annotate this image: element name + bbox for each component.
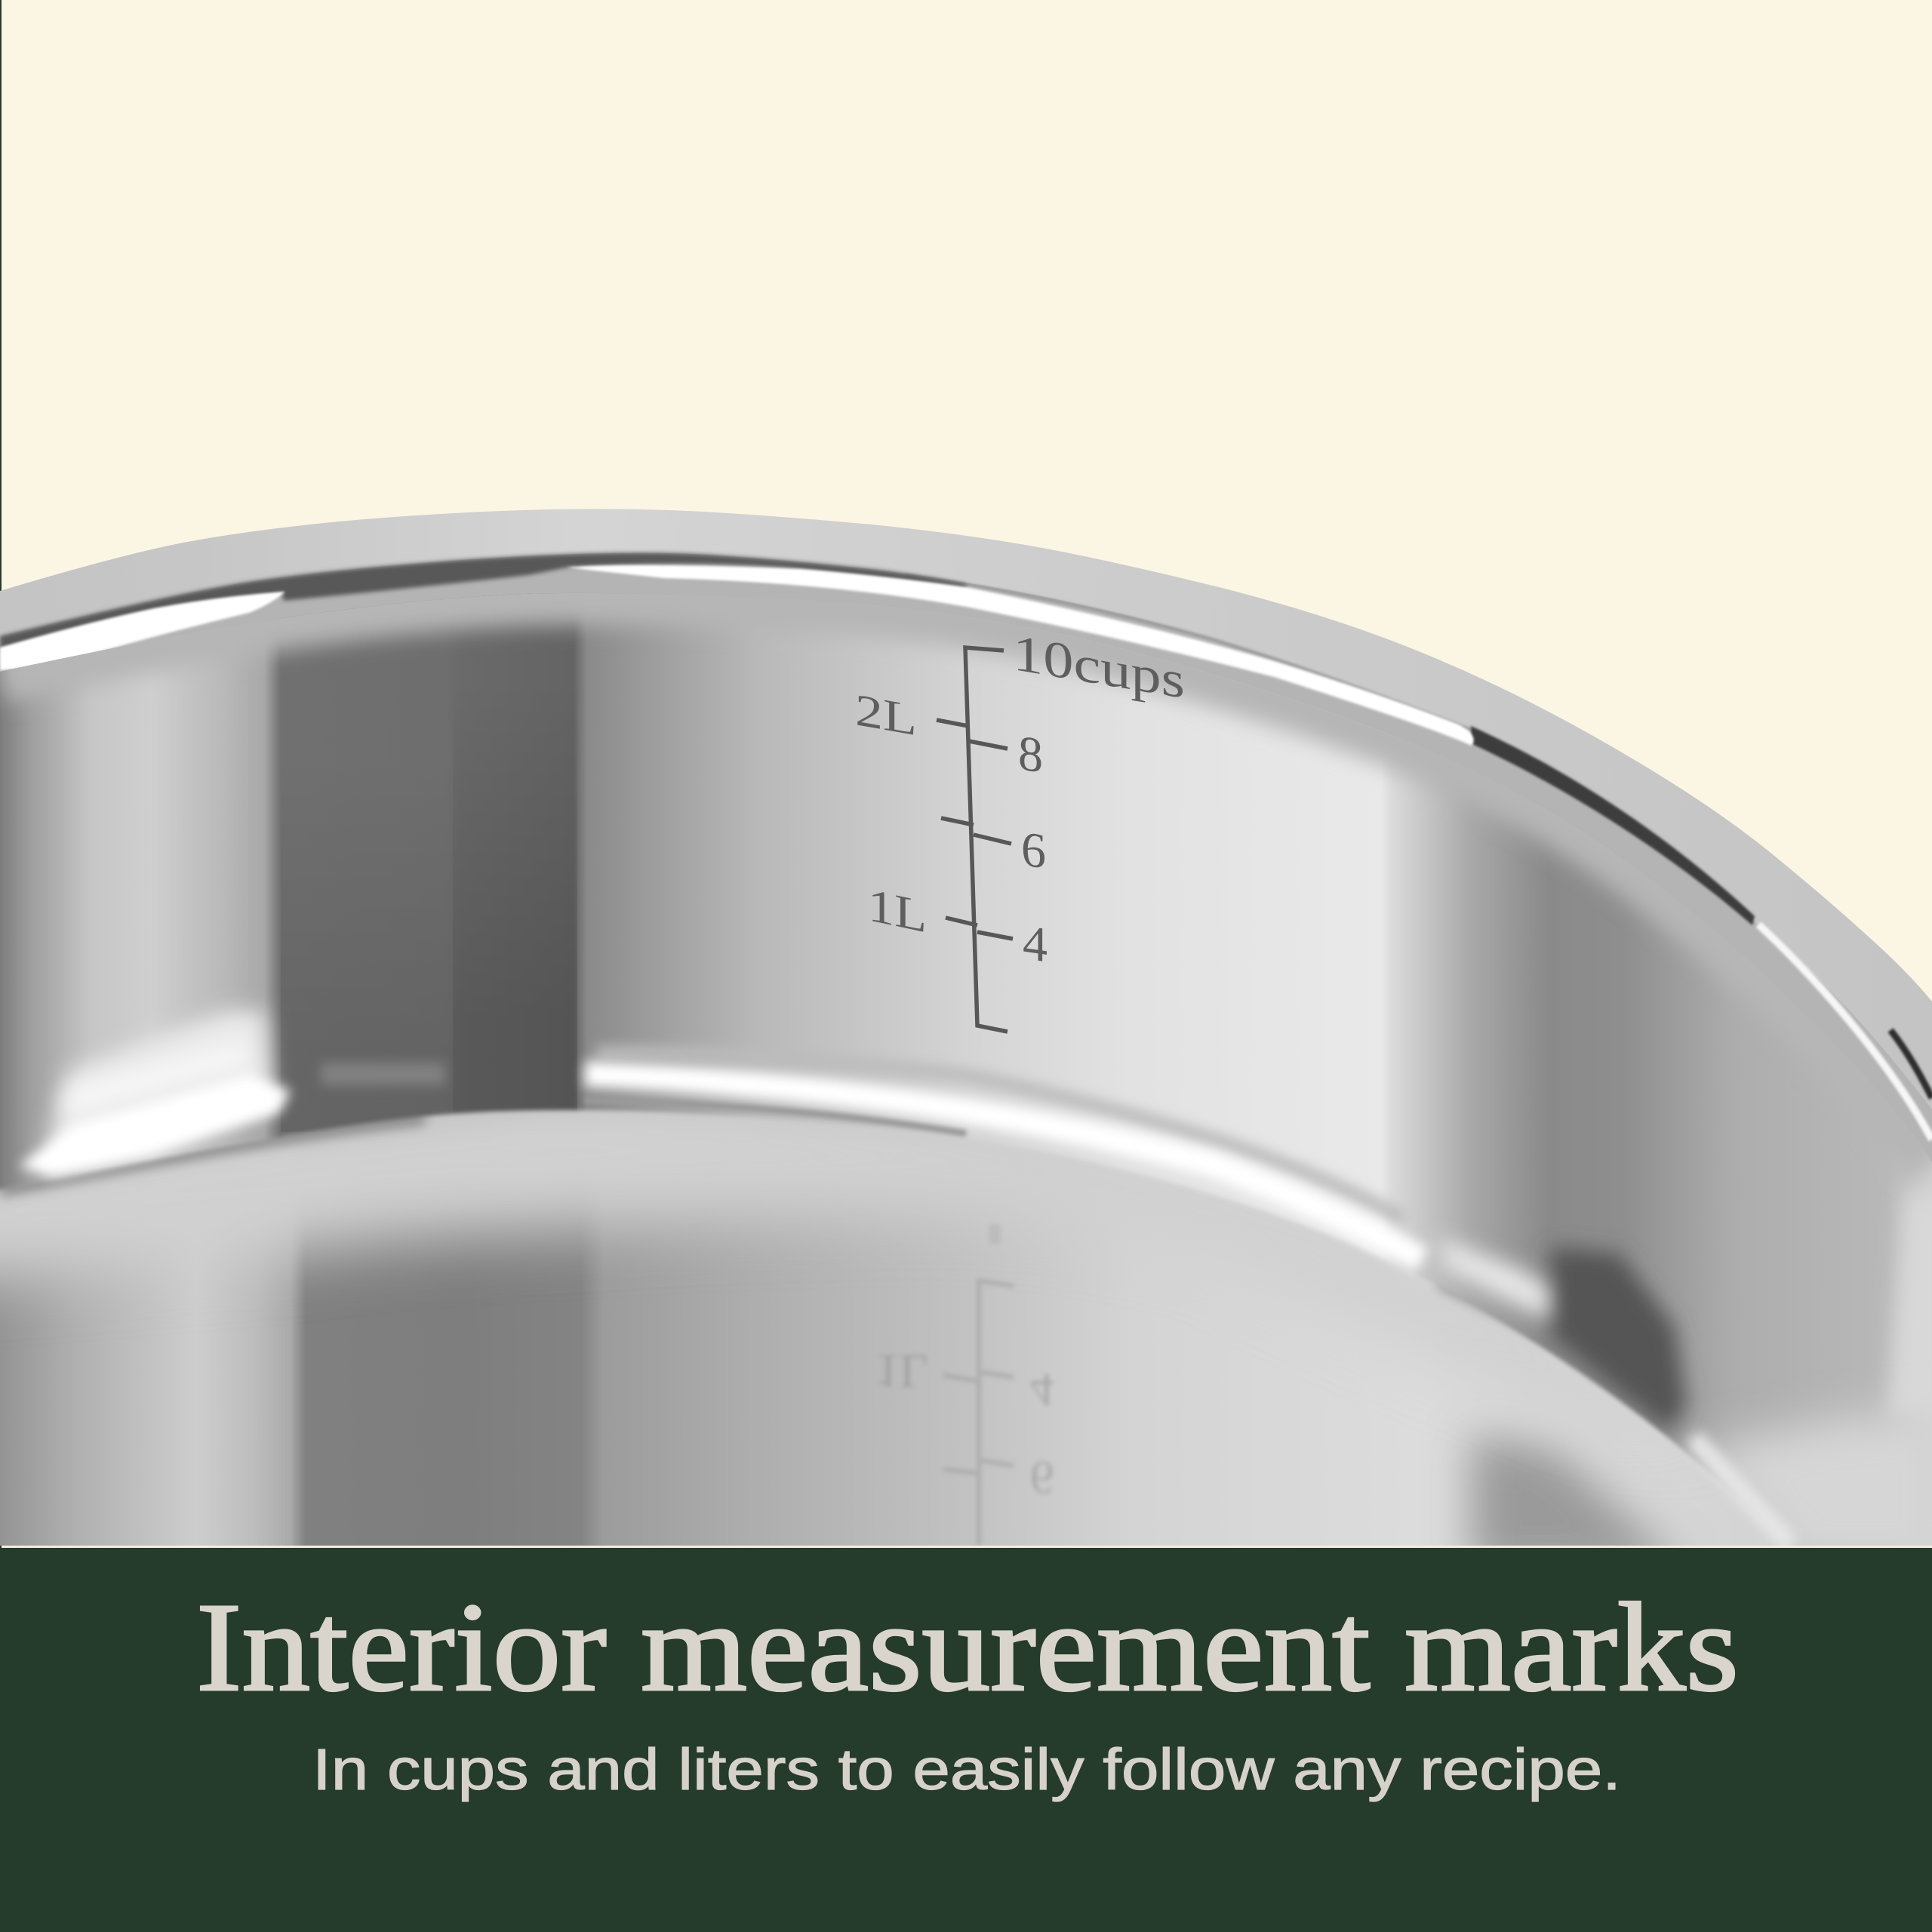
junction bright arc (585, 1074, 1422, 1260)
right wall pale edge (1887, 1192, 1932, 1419)
wall top soft band (0, 593, 1932, 1162)
lip top thin shadow (906, 575, 1471, 730)
left junction glow (45, 1011, 272, 1158)
left floor edge shadow (0, 1118, 425, 1191)
rim highlight left (0, 592, 285, 670)
pan floor (0, 1072, 1932, 1570)
label: 1L: 1L (868, 878, 927, 943)
label: 8: 8 (1018, 725, 1043, 784)
rim dark reflection left (0, 553, 966, 649)
lower rim streak (1693, 1438, 1792, 1546)
stainless steel pan photo (0, 483, 1932, 1570)
junction highlights (19, 1053, 1792, 1546)
label: 4: 4 (1023, 915, 1048, 974)
floor dark patch lower right (1472, 1434, 1683, 1570)
rim highlight centre (567, 565, 1474, 746)
label: 6: 6 (1021, 821, 1046, 880)
left junction upper streak (62, 1053, 247, 1103)
measurement scale (855, 623, 1185, 1032)
right junction patch (1438, 1238, 1549, 1321)
label: 2L: 2L (855, 685, 917, 746)
junction faint grey line (596, 1053, 1404, 1219)
dark band lower glint (321, 1063, 445, 1085)
left edge sliver (0, 0, 2, 596)
floor top reflection band (0, 1072, 1706, 1434)
label: 10 cups: 10cups (1013, 623, 1185, 709)
scale lines (937, 648, 1013, 1032)
panel background (0, 1546, 1932, 1932)
lower right pale area (1698, 1411, 1932, 1570)
rim dark reflection right (1471, 726, 1755, 925)
right dark blob (1551, 1247, 1687, 1434)
heading: Interior measurement marks (196, 1577, 1739, 1718)
dark band deepening (453, 679, 577, 1132)
right floor edge shadow (1441, 1279, 1551, 1333)
wall tonal bands (0, 574, 1932, 1555)
panel top hairline (2, 1546, 1932, 1548)
mirrored measurement scale: 1L (875, 1345, 929, 1398)
floor tonal bands (0, 1087, 1932, 1555)
caption panel (0, 1546, 1932, 1932)
pan wall (0, 574, 1932, 1570)
mirrored measurement scale: 6 (1030, 1451, 1054, 1503)
mirrored measurement scale: 4 (1030, 1364, 1054, 1415)
left junction highlight (19, 1075, 291, 1177)
pan outer rim (0, 509, 1932, 1109)
subheading: In cups and liters to easily follow any recipe. (312, 1737, 1621, 1802)
inner lip (0, 552, 1932, 1162)
rim highlight right (1758, 924, 1932, 1140)
dark band deepening left (281, 755, 453, 1132)
mirrored measurement scale (875, 1224, 1054, 1546)
rim dark corner (1890, 1030, 1932, 1098)
junction lower dark line (585, 1100, 966, 1134)
